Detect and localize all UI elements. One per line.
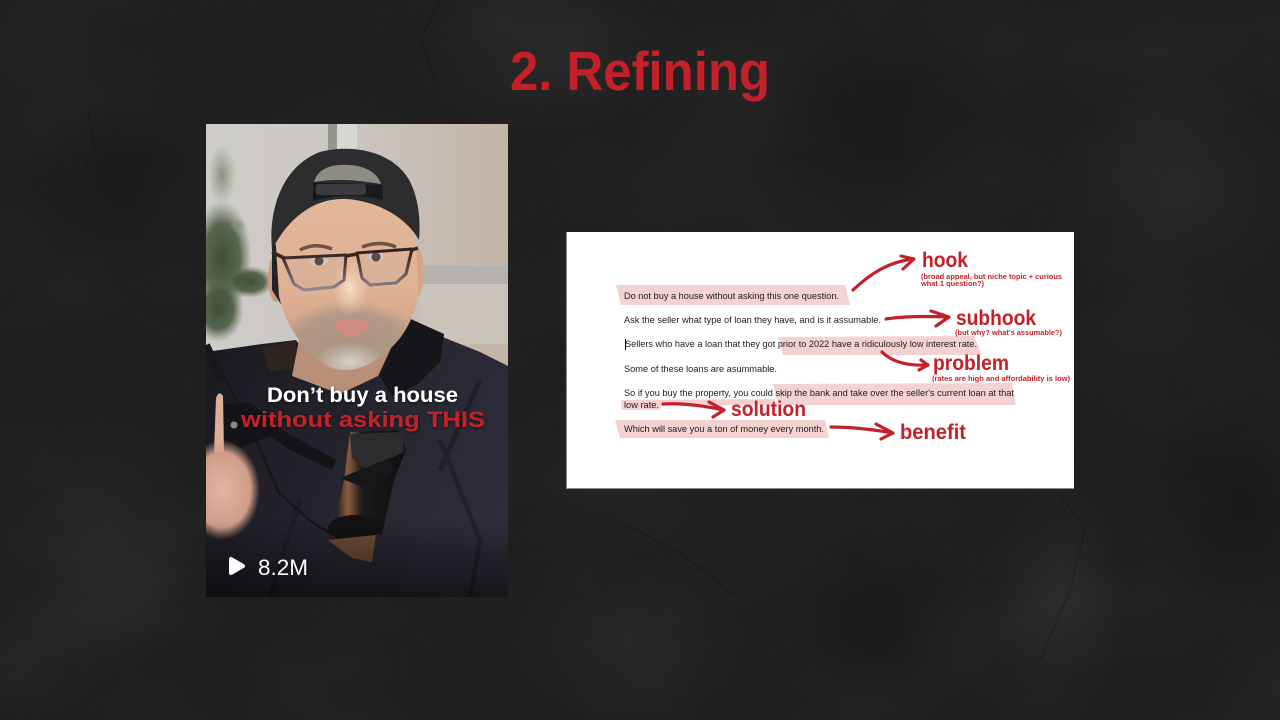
highlight: hook line: [616, 285, 850, 305]
hood collar: [380, 316, 444, 396]
jacket: [206, 316, 508, 597]
highlight: solution lines: [621, 383, 1016, 410]
face: [276, 200, 418, 348]
photo: room background: [206, 124, 508, 366]
photo: bottom shadow: [206, 520, 508, 597]
highlight: benefit line: [615, 420, 829, 438]
cap: [271, 149, 420, 250]
caption: red line: without asking THIS: [240, 407, 485, 432]
photo: presenter: [206, 149, 508, 597]
label: subhook: (but why? what's assumable?): [955, 328, 1062, 337]
script text: [624, 291, 1014, 435]
script text: So if you buy the property, you could skip the bank and take over the seller's current loan at that: [624, 388, 1014, 399]
panel: annotated script: [566, 232, 1074, 489]
highlight: problem line: [778, 336, 982, 355]
brows: [300, 244, 396, 250]
panel: video thumbnail: [184, 124, 508, 597]
jacket: fold shading: [438, 380, 482, 578]
label: hook: what 1 question?): [920, 279, 984, 288]
script text: low rate.: [624, 400, 659, 411]
script text: Do not buy a house without asking this one question.: [624, 291, 839, 302]
label: hook: hook: [922, 249, 968, 272]
label: subhook: subhook: [956, 307, 1036, 330]
icon: play: [231, 559, 243, 573]
label: problem: problem: [933, 352, 1009, 375]
photo: blurred plant: [206, 149, 269, 341]
script text: Some of these loans are asummable.: [624, 364, 777, 375]
nose: [336, 266, 364, 312]
label: problem: [932, 352, 1070, 383]
mouth: [333, 319, 371, 337]
text cursor: [625, 339, 626, 350]
eyes: [310, 252, 385, 266]
label: hook: [920, 249, 1062, 288]
photo: microphone arm and microphone: [206, 345, 406, 562]
cap strap opening: [314, 165, 381, 184]
neck: [292, 340, 392, 394]
caption: white line: Don’t buy a house: [267, 384, 458, 407]
beard: [290, 304, 409, 370]
label: subhook: [955, 307, 1062, 337]
arrows: [663, 256, 949, 439]
photo: raised hand: [206, 393, 260, 540]
label: benefit: benefit: [900, 421, 966, 444]
label: solution: solution: [731, 398, 806, 421]
label: problem: (rates are high and affordability is low): [932, 374, 1070, 383]
script text: Ask the seller what type of loan they have, and is it assumable.: [624, 315, 881, 326]
label: hook: (broad appeal, but niche topic + curious: [921, 272, 1062, 281]
title: 2. Refining: [510, 40, 770, 102]
script text: Sellers who have a loan that they got prior to 2022 have a ridiculously low interest rate.: [625, 339, 977, 350]
glasses: [283, 249, 412, 290]
script text: Which will save you a ton of money every month.: [624, 424, 824, 435]
view count: 8.2M: [258, 555, 308, 580]
cap rear flap: [272, 244, 282, 305]
photo: window frame and wall details: [328, 124, 508, 344]
ears: [268, 258, 278, 302]
